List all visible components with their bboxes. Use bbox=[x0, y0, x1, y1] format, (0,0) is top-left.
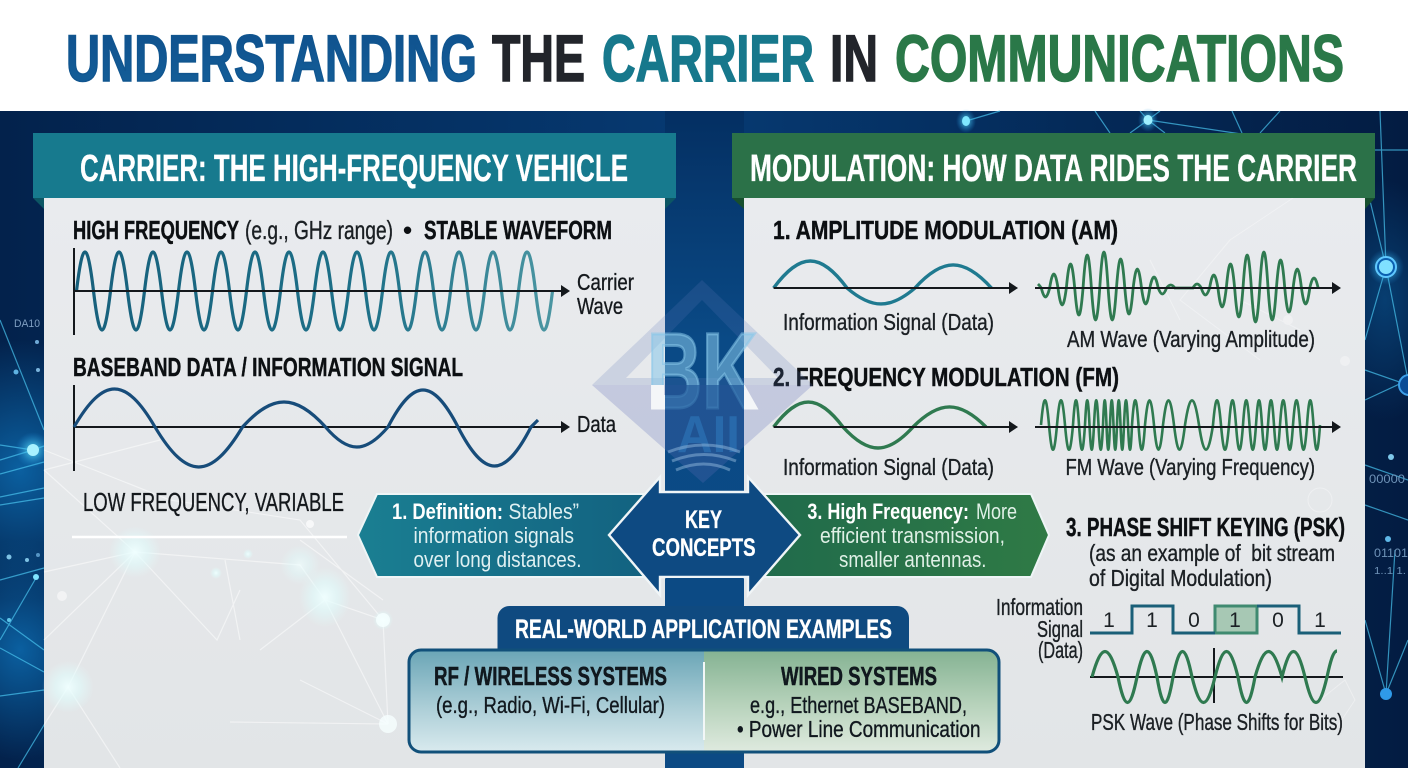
panel body: modulation bbox=[744, 198, 1365, 768]
panel header: modulation bbox=[732, 133, 1375, 209]
carrier heading bbox=[73, 215, 612, 245]
wireless systems bbox=[434, 661, 667, 718]
key concepts badge: CONCEPTS bbox=[652, 534, 756, 562]
network background: DA10 bbox=[14, 318, 40, 330]
chart: bit stream: 1 bbox=[1229, 609, 1241, 632]
heading: AM: 1. AMPLITUDE MODULATION (AM) bbox=[773, 215, 1118, 245]
wireless systems: RF / WIRELESS SYSTEMS bbox=[434, 661, 667, 691]
heading: FM: 2. FREQUENCY MODULATION (FM) bbox=[773, 362, 1119, 392]
panel header: carrier: CARRIER: THE HIGH-FREQUENCY VEHICLE bbox=[80, 148, 628, 190]
chart: AM information signal: Information Signal (Data) bbox=[783, 309, 994, 335]
section: frequency modulation bbox=[773, 362, 1341, 480]
watermark logo: AII bbox=[677, 406, 740, 464]
label: information signal data bbox=[996, 594, 1083, 663]
section: phase shift keying bbox=[996, 512, 1345, 735]
key concepts badge: KEY bbox=[685, 506, 722, 534]
baseband heading: BASEBAND DATA / INFORMATION SIGNAL bbox=[73, 352, 463, 382]
carrier heading: (e.g., GHz range) bbox=[245, 215, 393, 245]
chart: bit stream: 1 bbox=[1314, 609, 1326, 632]
label: information signal data: (Data) bbox=[1038, 637, 1083, 663]
panel: carrier bbox=[33, 133, 676, 768]
wired systems: e.g., Ethernet BASEBAND, bbox=[750, 692, 967, 718]
chart: FM information signal: Information Signal (Data) bbox=[783, 454, 994, 480]
title bbox=[66, 21, 1344, 95]
key concept: definition: information signals bbox=[414, 523, 574, 548]
key concept: high frequency: efficient transmission, bbox=[820, 523, 1005, 548]
watermark logo bbox=[592, 280, 813, 483]
watermark logo: BK bbox=[647, 310, 757, 431]
central vertical strip bbox=[665, 111, 744, 768]
chart: baseband data wave: Data bbox=[577, 411, 616, 437]
title: IN bbox=[830, 21, 878, 95]
carrier heading: STABLE WAVEFORM bbox=[424, 215, 612, 245]
wired systems: • Power Line Communication bbox=[737, 716, 980, 742]
title: CARRIER bbox=[602, 21, 814, 95]
chart: baseband data wave bbox=[74, 385, 616, 471]
wireless systems: (e.g., Radio, Wi-Fi, Cellular) bbox=[436, 692, 665, 718]
chart: carrier wave: Carrier bbox=[577, 269, 634, 295]
chart: FM information signal bbox=[774, 402, 1018, 480]
application examples bbox=[409, 606, 999, 752]
watermark logo: BK bbox=[647, 310, 757, 431]
network background: 1..1 1. bbox=[1374, 566, 1406, 577]
tab heading bbox=[498, 606, 909, 652]
key concept: high frequency: 3. High Frequency: bbox=[807, 499, 969, 524]
title band bbox=[0, 0, 1408, 111]
box background bbox=[409, 650, 999, 752]
chart: PSK wave bbox=[1090, 648, 1343, 735]
key concepts badge bbox=[609, 477, 800, 608]
key concept: definition: Stables” bbox=[508, 499, 579, 524]
label: information signal data: Information bbox=[996, 594, 1083, 620]
title: THE bbox=[492, 21, 585, 95]
key concept: definition bbox=[358, 494, 665, 577]
tab heading: REAL-WORLD APPLICATION EXAMPLES bbox=[515, 614, 892, 644]
key concept: definition: 1. Definition: bbox=[392, 499, 503, 524]
title: UNDERSTANDING bbox=[66, 21, 477, 95]
heading: PSK: of Digital Modulation) bbox=[1089, 565, 1272, 591]
panel body: carrier bbox=[44, 198, 665, 768]
panel network decoration bbox=[1150, 150, 1365, 730]
wired systems bbox=[737, 661, 980, 742]
chart: carrier wave bbox=[74, 248, 634, 335]
heading: PSK bbox=[1066, 512, 1345, 591]
carrier heading: HIGH FREQUENCY bbox=[73, 215, 239, 245]
wired systems: WIRED SYSTEMS bbox=[781, 661, 937, 691]
chart: AM information signal bbox=[774, 261, 1018, 335]
panel header: carrier bbox=[33, 133, 676, 209]
carrier heading: • bbox=[403, 215, 412, 245]
network background: 00000 bbox=[1369, 472, 1405, 486]
key concept: high frequency: smaller antennas. bbox=[839, 547, 986, 572]
chart: AM wave: AM Wave (Varying Amplitude) bbox=[1067, 326, 1315, 352]
network background: 01101 bbox=[1374, 546, 1408, 560]
chart: bit stream: 1 bbox=[1103, 609, 1115, 632]
chart: AM wave bbox=[1035, 252, 1341, 352]
heading: PSK: (as an example of bit stream bbox=[1089, 540, 1335, 566]
key concept: definition: over long distances. bbox=[414, 547, 582, 572]
chart: carrier wave: Wave bbox=[577, 293, 623, 319]
watermark logo: BK bbox=[647, 310, 757, 431]
chart: bit stream: 0 bbox=[1188, 609, 1200, 632]
label: information signal data: Signal bbox=[1037, 616, 1083, 642]
chart: FM wave: FM Wave (Varying Frequency) bbox=[1066, 454, 1315, 480]
chart: bit stream bbox=[1090, 606, 1341, 633]
chart: bit stream: 1 bbox=[1146, 609, 1158, 632]
key concept: high frequency bbox=[745, 494, 1049, 577]
key concept: high frequency: More bbox=[976, 499, 1017, 524]
chart: FM wave bbox=[1035, 400, 1341, 480]
section: amplitude modulation bbox=[773, 215, 1341, 352]
chart: bit stream: 0 bbox=[1272, 609, 1284, 632]
low frequency note: LOW FREQUENCY, VARIABLE bbox=[83, 487, 344, 517]
panel: modulation bbox=[732, 133, 1375, 768]
panel network decoration bbox=[42, 440, 397, 768]
